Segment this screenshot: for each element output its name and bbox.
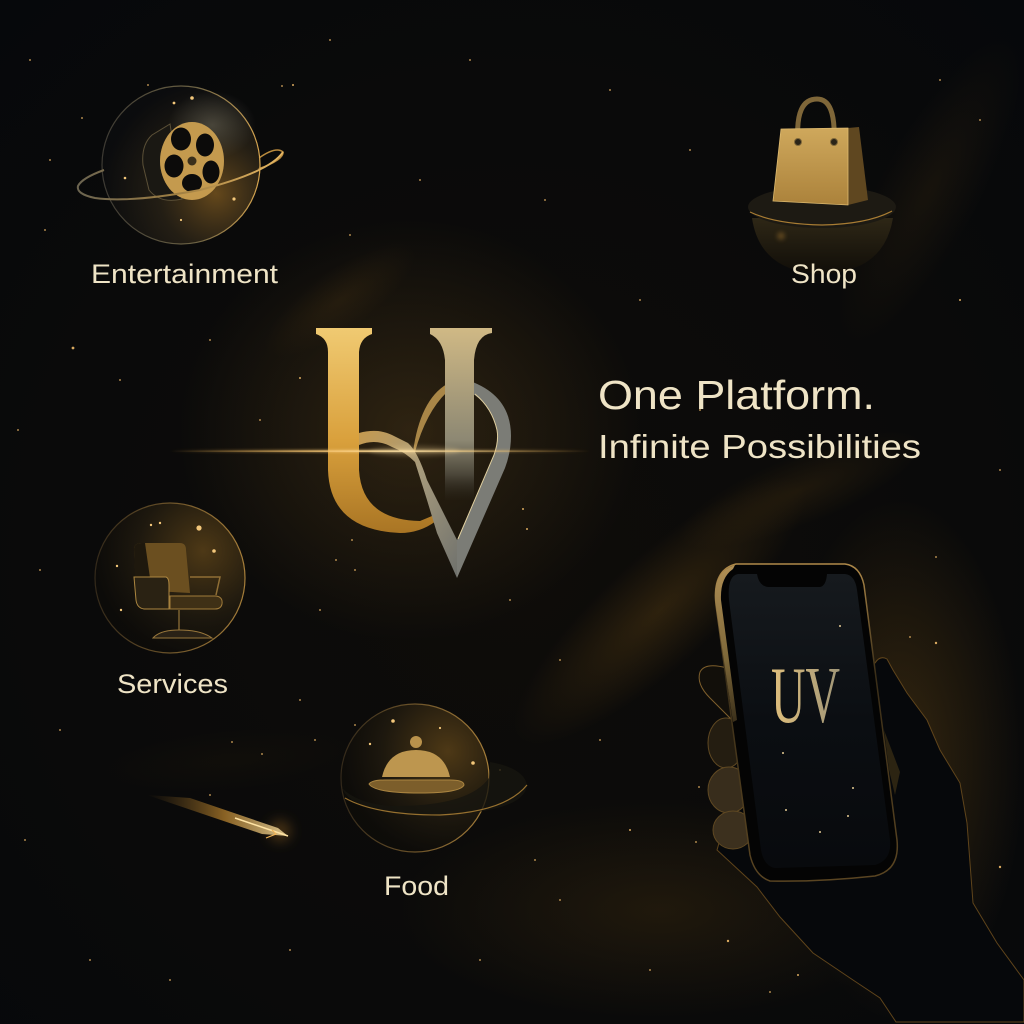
hand silhouette [717, 658, 1024, 1022]
label: Food: Food [384, 871, 449, 901]
V thin loop [413, 384, 447, 452]
panel: food [341, 704, 527, 901]
label: Entertainment: Entertainment [91, 259, 279, 289]
V right arm [457, 381, 511, 578]
hand holding phone [699, 564, 1024, 1022]
panel: services [95, 503, 245, 699]
fingers [699, 666, 900, 849]
U letter [316, 328, 436, 533]
orbit ring front [78, 152, 283, 199]
comet [147, 795, 291, 842]
label: Shop: Shop [791, 259, 857, 289]
icon: cloche [369, 736, 464, 793]
phone gold left edge [715, 565, 737, 722]
icon: chair [134, 543, 222, 638]
V stem [430, 328, 492, 500]
orbit disc [342, 762, 527, 815]
horizontal light flare [170, 446, 590, 456]
bowl [748, 186, 896, 274]
icon: film reel [143, 122, 224, 200]
sphere [102, 86, 260, 244]
V ribbon left arm [359, 431, 457, 578]
sphere [95, 503, 245, 653]
subheading: Infinite Possibilities: Infinite Possibilities [598, 428, 921, 465]
label: Services: Services [117, 669, 228, 699]
panel: entertainment planet [78, 86, 283, 289]
screen stars [782, 625, 854, 833]
phone body [715, 564, 897, 881]
logo: UV monogram [170, 328, 590, 578]
heading: One Platform.: One Platform. [598, 372, 875, 418]
panel: shop [748, 99, 896, 289]
ring back section [258, 150, 283, 169]
screen logo: UV: UV [771, 652, 840, 740]
icon: shopping bag [773, 99, 868, 205]
sphere [341, 704, 489, 852]
phone screen [729, 574, 890, 868]
tagline [598, 372, 921, 465]
